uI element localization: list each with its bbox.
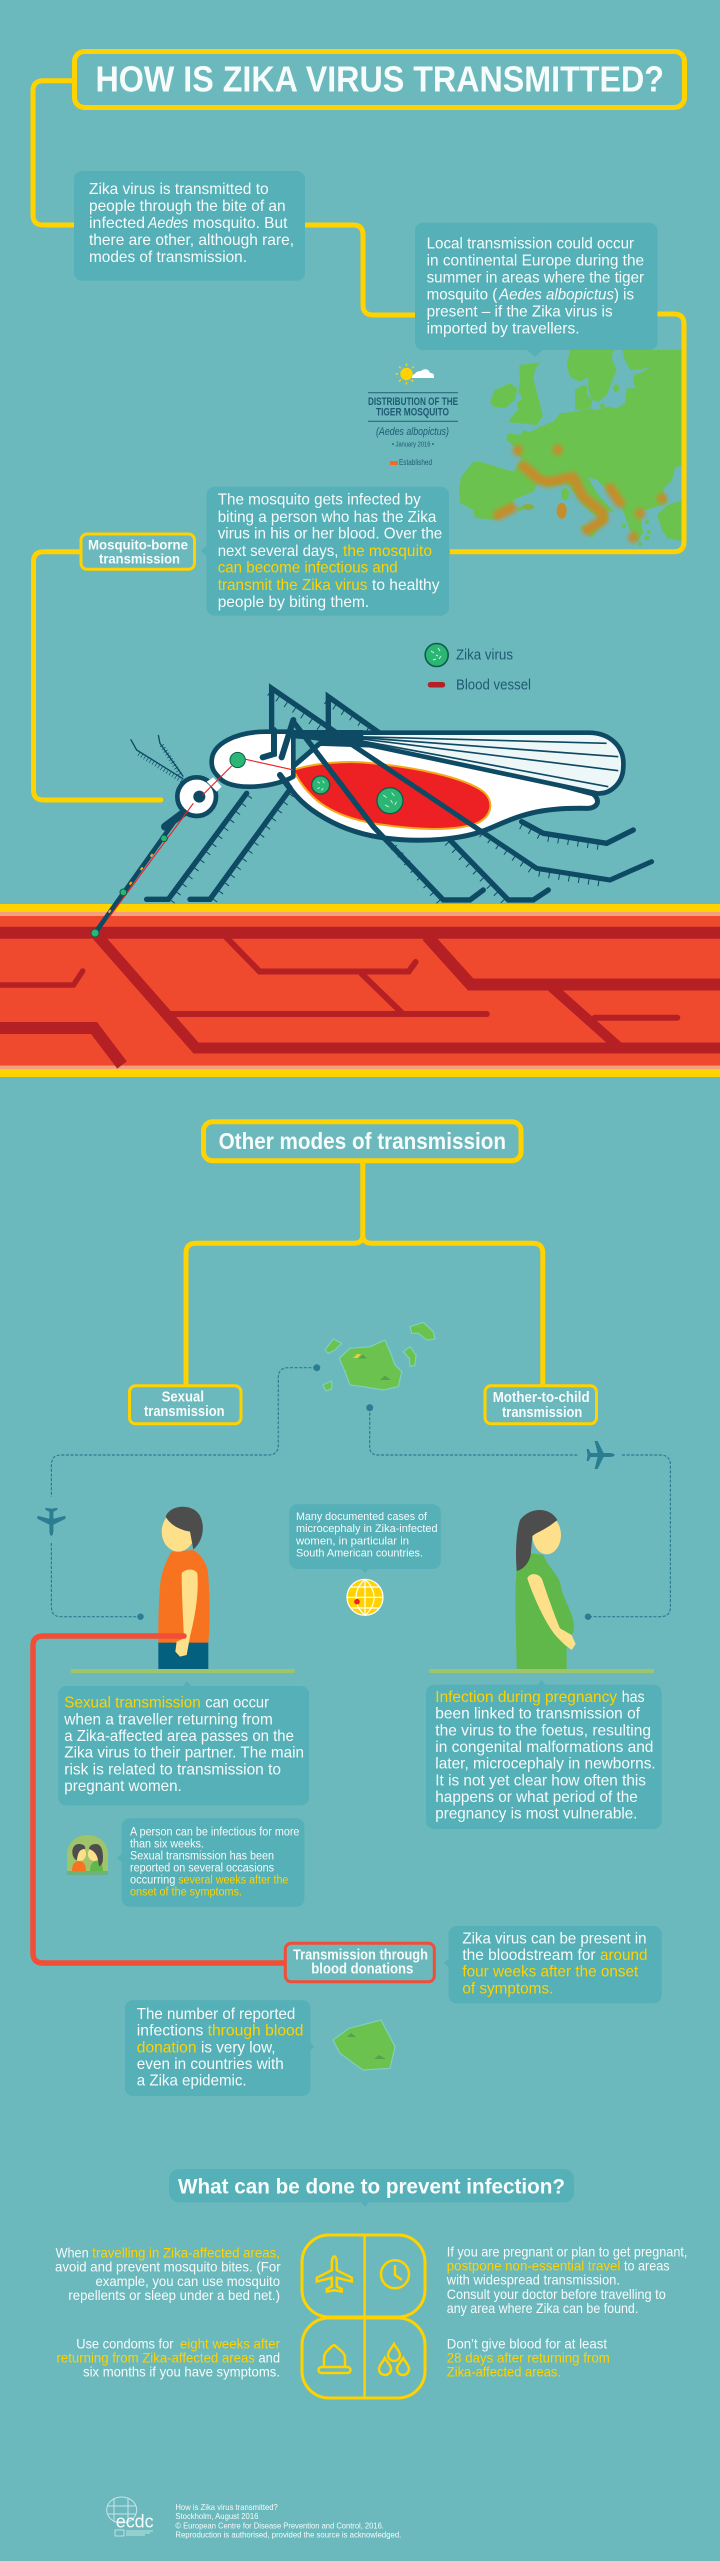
panel: mosquito gets infected: transmit the Zika virus (218, 577, 367, 594)
panel: mosquito gets infected: can become infectious and (218, 560, 398, 577)
legend: Zika virus: Zika virus (456, 647, 513, 664)
text: condoms advice: eight weeks after (180, 2335, 280, 2351)
footer text: Reproduction is authorised, provided the source is acknowledged. (175, 2529, 401, 2539)
logo: ecdc: ecdc (116, 2512, 154, 2532)
icon: plane right (587, 1441, 615, 1469)
panel: local transmission in Europe: summer in areas where the tiger (427, 269, 644, 286)
legend: Zika virus (425, 644, 513, 666)
antennae (131, 735, 183, 781)
prevention icon grid (302, 2235, 425, 2398)
far legs hairs (171, 692, 608, 903)
icon: clock (381, 2260, 409, 2288)
panel: sexual transmission: can occur (205, 1695, 269, 1712)
near legs (293, 722, 652, 900)
label: sexual transmission (130, 1386, 241, 1424)
icon: couple (67, 1835, 108, 1875)
panel: infection during pregnancy (426, 1680, 662, 1829)
panel: reported infections through blood donation: through blood (208, 2023, 304, 2040)
icon: condom (318, 2345, 350, 2373)
panel: microcephaly note: microcephaly in Zika-infected (296, 1523, 438, 1535)
abdomen (283, 743, 597, 840)
panel: infection during pregnancy: It is not yet clear how often this (435, 1772, 646, 1789)
figure: man (158, 1507, 210, 1669)
illustration: mosquito (91, 688, 652, 937)
map legend: distribution of the tiger mosquito: Established (399, 458, 432, 467)
map: island with affected area (323, 1322, 435, 1391)
label: sexual transmission: Sexual (162, 1389, 204, 1406)
map: small island (333, 2020, 395, 2070)
panel: bloodstream duration: of symptoms. (462, 1980, 553, 1997)
panel: intro text: modes of transmission. (89, 249, 247, 266)
text: condoms advice: and (258, 2349, 280, 2365)
panel: local transmission in Europe: imported by travellers. (427, 320, 580, 337)
label: mosquito-borne transmission: transmission (99, 550, 180, 566)
logo: ecdc (107, 2497, 154, 2536)
panel: infectious period: onset of the symptoms. (130, 1887, 242, 1899)
footer text (175, 2502, 401, 2539)
map: Europe tiger mosquito distribution (459, 350, 683, 546)
panel: mosquito gets infected: The mosquito gets infected by (218, 492, 421, 509)
panel: sexual transmission: a Zika-affected area passes on the (64, 1728, 294, 1745)
panel: mosquito gets infected: virus in his or her blood. Over the (218, 526, 442, 543)
text: pregnancy advice: If you are pregnant or plan to get pregnant, (447, 2243, 687, 2259)
dashed route: right traveller (370, 1408, 670, 1617)
text: blood donation advice (447, 2335, 610, 2380)
panel: infectious period: several weeks after the (178, 1875, 288, 1887)
panel: local transmission in Europe: Aedes albopictus (498, 286, 614, 303)
far legs (147, 688, 633, 900)
label: mother-to-child transmission (485, 1386, 596, 1424)
label: mother-to-child transmission: transmission (502, 1404, 582, 1421)
text: pregnancy advice: with widespread transmission. (446, 2272, 620, 2288)
head (177, 777, 216, 816)
proboscis (165, 812, 185, 827)
panel: infection during pregnancy: been linked to transmission of (435, 1706, 641, 1723)
red feeding line (108, 759, 293, 918)
panel: infectious period: occurring (130, 1875, 175, 1887)
viruses in abdomen (312, 776, 403, 814)
panel: reported infections through blood donation: infections (137, 2023, 203, 2040)
panel: microcephaly note: Many documented cases of (296, 1511, 428, 1523)
text: condoms advice: Use condoms for (76, 2335, 174, 2351)
panel: reported infections through blood donation: is very low, (201, 2039, 276, 2056)
panel: local transmission in Europe (415, 223, 658, 357)
viruses in proboscis and head (91, 752, 245, 937)
icon: globe (347, 1579, 383, 1615)
route dots (137, 1364, 591, 1620)
legend: blood vessel: Blood vessel (456, 676, 531, 693)
panel: mosquito gets infected: biting a person who has the Zika (218, 509, 437, 526)
text: travelling advice: repellents or sleep under a bed net.) (68, 2287, 280, 2303)
text: travelling advice: example, you can use mosquito (96, 2273, 280, 2289)
panel: sexual transmission (58, 1681, 309, 1805)
map legend: distribution of the tiger mosquito: • January 2016 • (392, 442, 434, 449)
map legend: distribution of the tiger mosquito: (Aedes albopictus) (376, 426, 449, 438)
footer text: Stockholm, August 2016 (175, 2511, 259, 2521)
panel: bloodstream duration: Zika virus can be present in (462, 1930, 646, 1947)
map legend: distribution of the tiger mosquito (368, 393, 458, 467)
label: mother-to-child transmission: Mother-to-child (493, 1389, 590, 1406)
panel: intro text (74, 171, 305, 281)
panel: intro text: Zika virus is transmitted to (89, 181, 269, 198)
panel: infection during pregnancy: pregnancy is most vulnerable. (435, 1806, 637, 1823)
label: transmission through blood donations: blood donations (311, 1962, 413, 1978)
label: transmission through blood donations (285, 1943, 434, 1982)
panel: infection during pregnancy: the virus to the foetus, resulting (435, 1722, 651, 1739)
connector: red line to blood donations (33, 1636, 285, 1963)
wing veins (357, 737, 618, 787)
panel: bloodstream duration: the bloodstream for (462, 1947, 596, 1964)
text: pregnancy advice: any area where Zika can be found. (447, 2300, 638, 2316)
panel: sexual transmission: pregnant women. (64, 1778, 182, 1795)
panel: local transmission in Europe: in continental Europe during the (427, 252, 644, 269)
panel: sexual transmission: Zika virus to their partner. The main (64, 1745, 304, 1762)
panel: infection during pregnancy: in congenital malformations and (435, 1739, 653, 1756)
icon: sun and cloud (396, 364, 434, 384)
panel: microcephaly note: women, in particular in (295, 1535, 409, 1547)
thorax (212, 732, 293, 787)
panel: reported infections through blood donation (125, 2000, 314, 2096)
skin with blood vessels (0, 904, 720, 1077)
panel: mosquito gets infected: people by biting them. (218, 594, 369, 611)
text: travelling advice: avoid and prevent mosquito bites. (For (55, 2259, 281, 2275)
panel: intro text: infected (89, 215, 145, 232)
label: sexual transmission: transmission (144, 1403, 224, 1420)
label: mosquito-borne transmission: Mosquito-borne (88, 537, 188, 553)
panel: bloodstream duration: around (600, 1947, 648, 1964)
panel: infection during pregnancy: happens or what period of the (435, 1789, 638, 1806)
panel: microcephaly note: South American countries. (296, 1547, 423, 1559)
text: travelling advice (55, 2244, 281, 2303)
panel: sexual transmission: when a traveller returning from (63, 1711, 273, 1728)
panel: mosquito gets infected: next several days, (218, 543, 338, 560)
panel: bloodstream duration: four weeks after the onset (462, 1964, 639, 1981)
panel: bloodstream duration (444, 1926, 662, 2003)
text: blood donation advice: 28 days after returning from (447, 2349, 610, 2365)
text: pregnancy advice: Consult your doctor before travelling to (447, 2286, 666, 2302)
front leg stubs (263, 720, 293, 788)
panel: local transmission in Europe: mosquito ( (427, 286, 498, 303)
text: travelling advice: travelling in Zika-affected areas, (92, 2244, 280, 2260)
panel: prevention heading (169, 2169, 574, 2207)
panel: infection during pregnancy: Infection during pregnancy (435, 1689, 617, 1706)
label: transmission through blood donations: Transmission through (293, 1947, 428, 1963)
figure: pregnant woman (516, 1510, 576, 1669)
panel: microcephaly note (289, 1504, 441, 1573)
panel: intro text: Aedes (147, 215, 188, 232)
panel: infectious period: reported on several occasions (130, 1863, 274, 1875)
dashed route: left traveller (51, 1368, 316, 1617)
footer text: How is Zika virus transmitted? (175, 2502, 278, 2512)
text: condoms advice (56, 2335, 280, 2380)
text: pregnancy advice (446, 2243, 687, 2316)
panel: mosquito gets infected: to healthy (372, 577, 440, 594)
legend: blood vessel (428, 676, 531, 693)
wing (340, 733, 623, 793)
panel: intro text: people through the bite of an (89, 198, 286, 215)
title (74, 52, 684, 108)
text: condoms advice: returning from Zika-affected areas (56, 2349, 255, 2365)
icon: plane down (37, 1508, 65, 1536)
label: mosquito-borne transmission (81, 534, 194, 569)
text: pregnancy advice: postpone non-essential travel (447, 2258, 620, 2274)
panel: infectious period (117, 1818, 304, 1907)
panel: local transmission in Europe: Local transmission could occur (427, 235, 634, 252)
text: condoms advice: six months if you have symptoms. (83, 2364, 280, 2380)
panel: intro text: mosquito. But (193, 215, 288, 232)
connector: mosquito-borne label to mosquito (34, 552, 161, 800)
panel: sexual transmission: risk is related to transmission to (64, 1761, 281, 1778)
panel: prevention heading: What can be done to prevent infection? (178, 2175, 565, 2198)
connector: local transmission to mosquito text (450, 314, 684, 552)
icon: plane (317, 2256, 352, 2292)
map legend: distribution of the tiger mosquito: TIGER MOSQUITO (376, 407, 449, 419)
text: blood donation advice: Zika-affected areas. (447, 2364, 561, 2380)
panel: intro text: there are other, although rare, (89, 232, 294, 249)
panel: reported infections through blood donation: even in countries with (137, 2056, 284, 2073)
connector: title to intro (33, 81, 74, 225)
panel: infection during pregnancy: has (622, 1689, 645, 1706)
icon: blood drops (379, 2344, 409, 2375)
panel: local transmission in Europe: ) is (614, 286, 634, 303)
wing root (277, 730, 363, 747)
text: pregnancy advice: to areas (624, 2258, 670, 2274)
heading: other modes of transmission: Other modes of transmission (219, 1128, 506, 1154)
panel: reported infections through blood donation: donation (137, 2039, 196, 2056)
connector: other modes bracket (186, 1163, 543, 1385)
panel: mosquito gets infected: the mosquito (343, 543, 432, 560)
panel: infectious period: than six weeks. (130, 1838, 204, 1850)
panel: reported infections through blood donation: a Zika epidemic. (137, 2073, 247, 2090)
connector: intro to local transmission (305, 225, 415, 315)
panel: reported infections through blood donation: The number of reported (137, 2006, 295, 2023)
ground lines (71, 1669, 654, 1673)
heading: other modes of transmission (204, 1122, 521, 1161)
panel: infectious period: A person can be infectious for more (130, 1826, 299, 1838)
footer text: © European Centre for Disease Prevention and Control, 2016. (175, 2520, 384, 2530)
text: blood donation advice: Don’t give blood for at least (447, 2335, 607, 2351)
panel: sexual transmission: Sexual transmission (64, 1695, 201, 1712)
map legend: distribution of the tiger mosquito: DISTRIBUTION OF THE (368, 396, 458, 408)
panel: local transmission in Europe: present – if the Zika virus is (427, 303, 613, 320)
text: travelling advice: When (56, 2244, 89, 2260)
title: HOW IS ZIKA VIRUS TRANSMITTED? (96, 59, 664, 100)
blood in abdomen (293, 762, 490, 829)
panel: infection during pregnancy: later, microcephaly in newborns. (435, 1756, 656, 1773)
panel: mosquito gets infected (201, 487, 449, 616)
panel: infectious period: Sexual transmission has been (130, 1850, 274, 1862)
